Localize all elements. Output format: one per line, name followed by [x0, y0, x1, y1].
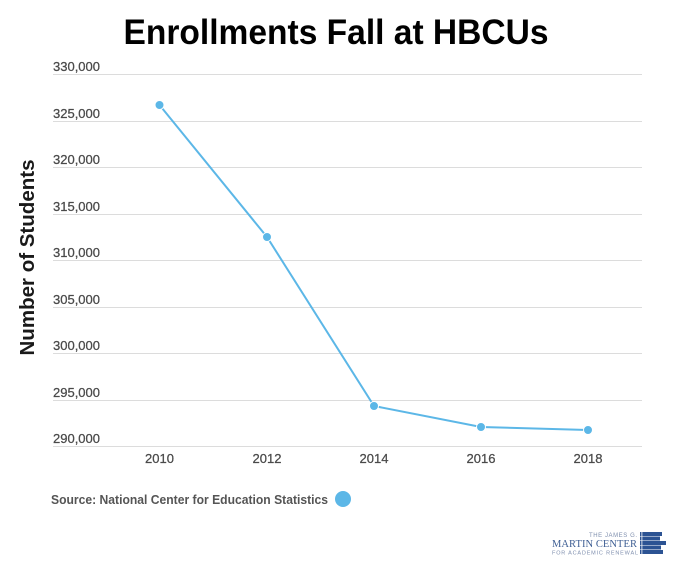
- x axis labels: 2018: [574, 451, 602, 466]
- x axis labels: 2012: [253, 451, 281, 466]
- y axis labels: 315,000: [53, 199, 100, 214]
- logo: Martin Center: FOR ACADEMIC RENEWAL: [552, 550, 638, 556]
- x axis labels: 2014: [360, 451, 388, 466]
- y axis labels: 320,000: [53, 152, 100, 167]
- logo: Martin Center: [552, 532, 666, 556]
- logo: Martin Center: MARTIN CENTER: [552, 539, 637, 550]
- data line: [160, 105, 588, 430]
- logo: Martin Center: THE JAMES G.: [589, 533, 637, 539]
- y axis labels: 310,000: [53, 245, 100, 260]
- x axis labels: 2010: [145, 451, 174, 466]
- y axis labels: 325,000: [53, 106, 100, 121]
- icon: book stack: [640, 532, 666, 554]
- line chart: [53, 59, 642, 466]
- data points: [155, 100, 592, 434]
- x axis labels: 2016: [467, 451, 495, 466]
- y axis labels: [53, 59, 100, 446]
- legend: source: Source: National Center for Education Statistics: [51, 492, 328, 507]
- y axis labels: 330,000: [53, 59, 100, 74]
- y axis labels: 290,000: [53, 431, 100, 446]
- y axis title: Number of Students: [17, 160, 39, 356]
- x axis labels: [145, 451, 602, 466]
- y axis labels: 300,000: [53, 338, 100, 353]
- y axis labels: 295,000: [53, 385, 100, 400]
- y axis labels: 305,000: [53, 292, 100, 307]
- title: Enrollments Fall at HBCUs: [124, 13, 548, 52]
